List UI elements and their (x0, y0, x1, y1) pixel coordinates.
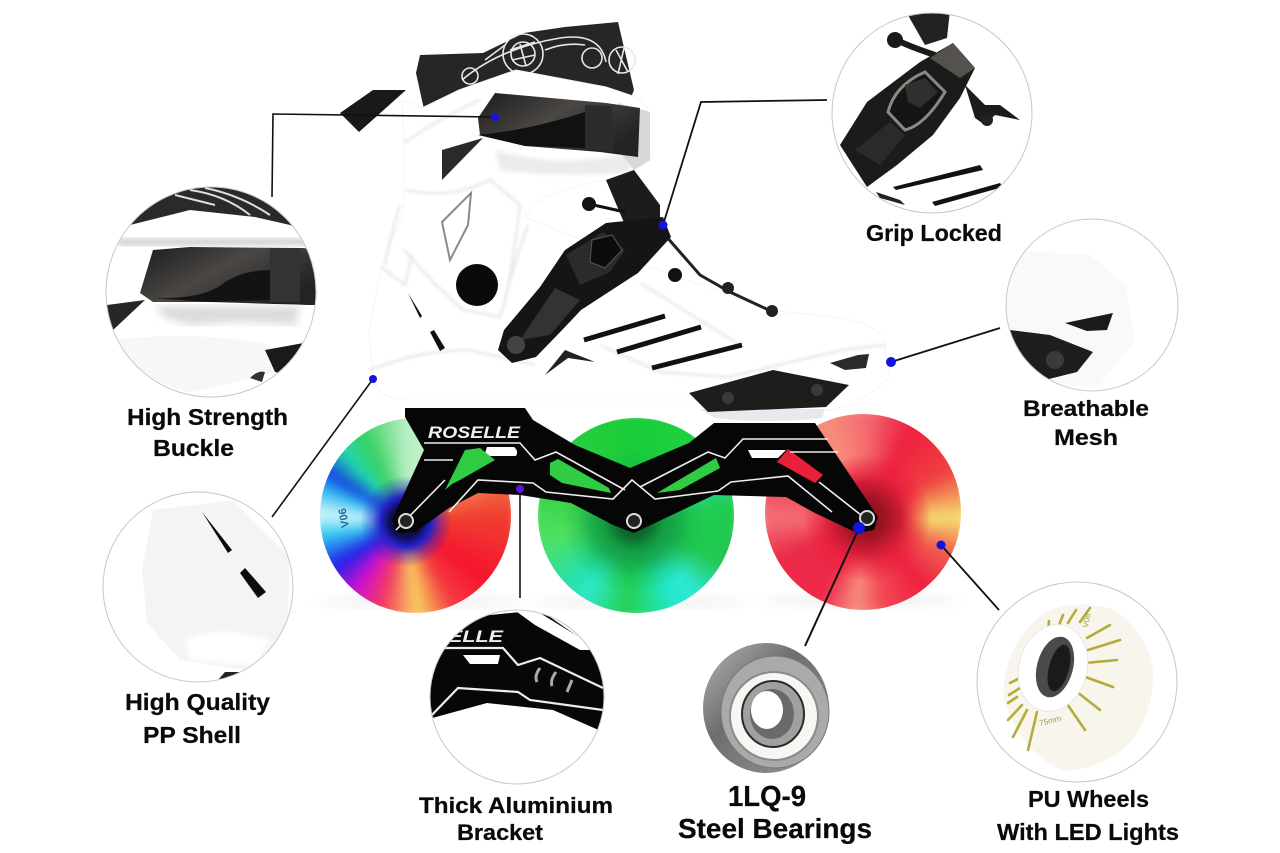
marker (853, 522, 865, 534)
label (127, 404, 288, 461)
leader line (663, 100, 827, 225)
sole protector (689, 370, 849, 412)
detail circle (107, 188, 316, 382)
leader line (941, 545, 999, 610)
label (678, 781, 872, 844)
marker (936, 540, 946, 550)
frame white lines (396, 439, 861, 530)
label: Grip Locked (866, 220, 1002, 246)
label: PP Shell (143, 722, 241, 748)
label: Bracket (457, 820, 544, 845)
label: Mesh (1054, 425, 1118, 450)
detail circle: 75mm (1038, 714, 1062, 728)
label: Thick Aluminium (419, 793, 613, 818)
grip lock lever (498, 217, 671, 363)
callout: PP shell (103, 375, 377, 748)
eyelets and laces (582, 197, 596, 211)
label: High Quality (125, 689, 270, 715)
sole underside (700, 409, 825, 421)
ankle pivot (456, 264, 498, 306)
detail circle (840, 14, 1020, 206)
detail circle: ELLE (448, 627, 504, 646)
toe vent (830, 354, 869, 370)
wheel: rainbow rear (320, 418, 511, 613)
detail circle (1003, 604, 1153, 770)
axle bolts (399, 511, 874, 528)
detail circle: V06 (1081, 612, 1093, 628)
toe stripes (584, 316, 742, 368)
skate frame (392, 408, 878, 533)
frame body (392, 408, 878, 533)
marker (369, 375, 377, 383)
chevron (545, 350, 595, 375)
shell panel shading (370, 100, 885, 377)
wheel marking: V06 (337, 507, 352, 529)
heel slits (408, 293, 445, 351)
detail circle (142, 500, 290, 680)
callout: steel bearings (678, 522, 872, 844)
detail circle (1010, 313, 1113, 379)
leader line (805, 528, 859, 646)
ankle logo (442, 193, 471, 260)
ankle lace (582, 170, 778, 317)
callout: PU wheels (936, 540, 1179, 845)
floor shadow (320, 594, 960, 608)
leader line (272, 379, 373, 517)
detail circle (430, 612, 604, 730)
label: Steel Bearings (678, 813, 872, 844)
callout: breathable mesh (886, 219, 1178, 450)
frame cutouts (484, 447, 786, 458)
label: Breathable (1023, 396, 1149, 421)
label: Buckle (153, 435, 234, 461)
label: With LED Lights (997, 819, 1179, 845)
marker (491, 113, 499, 121)
label (419, 793, 613, 845)
marker (516, 485, 524, 493)
label: High Strength (127, 404, 288, 430)
leader line (519, 489, 521, 598)
wheel: green middle (538, 418, 734, 613)
wheel: red front (765, 414, 961, 610)
fold shading (155, 306, 300, 325)
callout: high strength buckle (100, 113, 499, 461)
under-buckle folds (495, 150, 632, 175)
label (997, 786, 1179, 845)
ankle strap flap (340, 90, 406, 132)
callout: grip locked (658, 10, 1032, 246)
bearing (703, 643, 829, 773)
wheel spokes (1008, 608, 1120, 750)
tongue pattern (462, 34, 635, 84)
label: PU Wheels (1028, 786, 1149, 812)
side vent (442, 138, 483, 180)
callout: aluminium bracket (419, 485, 613, 845)
marker (886, 357, 896, 367)
label: 1LQ-9 (728, 781, 806, 813)
boot tongue (416, 22, 635, 114)
boot shell (369, 70, 889, 421)
upper buckle (478, 93, 650, 170)
label (125, 689, 270, 748)
leader line (891, 328, 1000, 362)
brand name: ROSELLE (428, 423, 521, 442)
leader line (272, 114, 495, 197)
label (1023, 396, 1149, 450)
marker (658, 220, 668, 230)
